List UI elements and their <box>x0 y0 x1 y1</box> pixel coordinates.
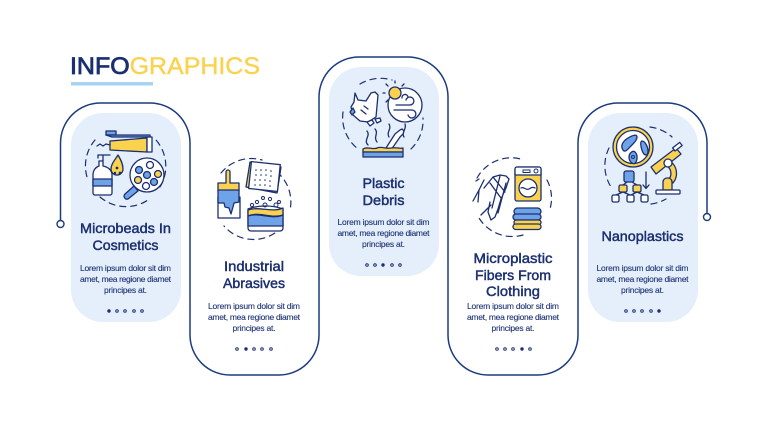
panel: microbeads in cosmetics: amet, mea regione diamet <box>80 274 172 284</box>
panel: microplastic fibers from clothing <box>467 158 560 351</box>
panel: microplastic fibers from clothing: amet, mea regione diamet <box>467 312 560 322</box>
panel: plastic debris: Lorem ipsum dolor sit dim <box>338 217 430 227</box>
panel: nanoplastics: Lorem ipsum dolor sit dim <box>596 263 688 273</box>
panel: microplastic fibers from clothing: Clothing <box>486 283 540 299</box>
panel: plastic debris: amet, mea regione diamet <box>338 228 430 238</box>
panel: plastic debris: Plastic <box>362 175 404 191</box>
panel: nanoplastics: principes at. <box>621 285 664 295</box>
panel: nanoplastics: Nanoplastics <box>602 228 684 244</box>
panel: microplastic fibers from clothing: Microplastic <box>474 250 552 266</box>
panel: industrial abrasives <box>208 159 301 351</box>
icon: clothing <box>473 158 552 237</box>
pagination dots <box>366 263 401 267</box>
panel: industrial abrasives: principes at. <box>232 323 276 333</box>
panel: plastic debris <box>329 67 439 276</box>
pagination dots <box>496 347 531 351</box>
icon: nanoplastics <box>605 127 682 204</box>
panel: microplastic fibers from clothing: Fibers From <box>475 267 551 283</box>
connecting outline path <box>57 57 710 375</box>
icon: abrasives <box>218 159 291 239</box>
title: INFOGRAPHICS <box>70 53 260 80</box>
panel: nanoplastics <box>588 113 698 322</box>
panel: microplastic fibers from clothing: Lorem ipsum dolor sit dim <box>467 301 559 311</box>
panel: microplastic fibers from clothing: principes at. <box>492 323 534 333</box>
panel: industrial abrasives: Industrial <box>224 258 284 274</box>
icon: cosmetics <box>85 131 166 207</box>
panel: microbeads in cosmetics: Lorem ipsum dolor sit dim <box>80 263 171 273</box>
panel: microbeads in cosmetics: Cosmetics <box>92 237 158 253</box>
panel: industrial abrasives: amet, mea regione diamet <box>208 312 301 322</box>
panel: microbeads in cosmetics <box>71 113 181 322</box>
pagination dots <box>107 309 143 313</box>
icon: plastic debris <box>343 78 423 157</box>
panel: microbeads in cosmetics: principes at. <box>104 285 147 295</box>
pagination dots <box>625 309 661 313</box>
panel: nanoplastics: amet, mea regione diamet <box>596 274 689 284</box>
panel: microbeads in cosmetics: Microbeads In <box>80 220 171 236</box>
pagination dots <box>236 347 272 351</box>
panel: plastic debris: principes at. <box>362 239 405 249</box>
panel: industrial abrasives: Abrasives <box>223 275 285 291</box>
panel: plastic debris: Debris <box>362 192 404 208</box>
panel: industrial abrasives: Lorem ipsum dolor sit dim <box>208 301 300 311</box>
